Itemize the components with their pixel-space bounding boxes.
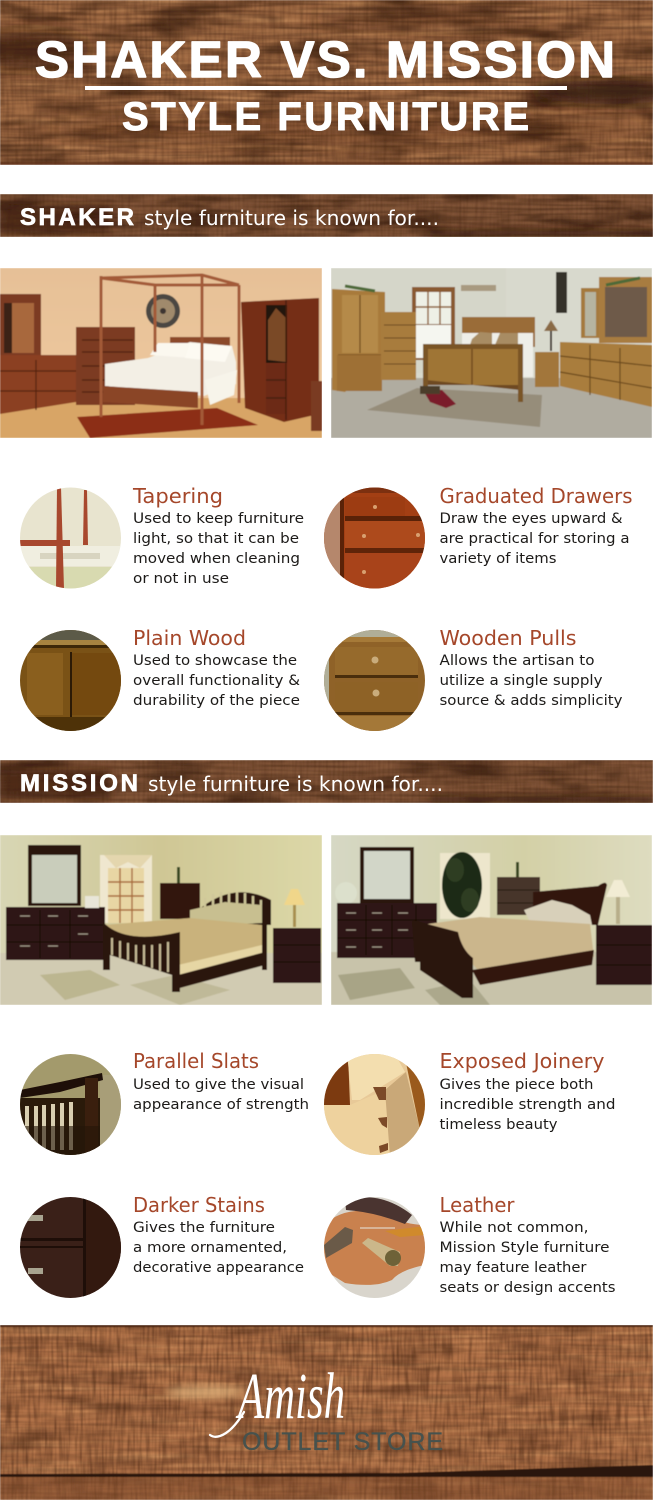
footer wood panel bbox=[0, 1325, 653, 1500]
graduated drawers heading: Graduated Drawers bbox=[440, 484, 632, 508]
tapering description: moved when cleaning bbox=[133, 551, 300, 567]
tapering description: light, so that it can be bbox=[133, 531, 299, 547]
darker stains description: decorative appearance bbox=[133, 1260, 304, 1276]
wooden pulls description bbox=[440, 653, 623, 709]
graduated drawers description: variety of items bbox=[440, 551, 556, 567]
plain wood description bbox=[133, 653, 300, 709]
icon: dovetail joint bbox=[324, 1054, 426, 1160]
shaker banner wood texture bbox=[0, 194, 653, 237]
exposed joinery heading: Exposed Joinery bbox=[440, 1049, 604, 1073]
tapering description: Used to keep furniture bbox=[133, 511, 304, 527]
feature: wooden pulls bbox=[324, 626, 623, 732]
feature: plain wood bbox=[20, 626, 300, 732]
shaker label: SHAKER bbox=[20, 204, 134, 231]
feature: tapering bbox=[20, 484, 304, 589]
wooden pulls heading: Wooden Pulls bbox=[440, 626, 576, 650]
darker stains description: a more ornamented, bbox=[133, 1240, 287, 1256]
footer wood texture bbox=[0, 1325, 653, 1500]
feature: parallel slats bbox=[20, 1049, 309, 1156]
logo: amish outlet store bbox=[210, 1360, 443, 1456]
feature: leather bbox=[324, 1193, 616, 1299]
photo: shaker oak bedroom bbox=[331, 268, 652, 438]
tapering description: or not in use bbox=[133, 571, 229, 587]
icon: dark stained drawers bbox=[20, 1197, 121, 1299]
plain wood heading: Plain Wood bbox=[133, 626, 246, 650]
exposed joinery description: timeless beauty bbox=[440, 1117, 558, 1133]
leather heading: Leather bbox=[440, 1193, 515, 1217]
shaker tagline: style furniture is known for.... bbox=[144, 206, 439, 230]
icon: tapered bed post bbox=[20, 487, 121, 589]
photo: mission slat bed bedroom bbox=[0, 835, 322, 1005]
feature: darker stains bbox=[20, 1193, 304, 1299]
plain wood description: durability of the piece bbox=[133, 693, 300, 709]
exposed joinery description bbox=[440, 1077, 616, 1133]
feature: exposed joinery bbox=[324, 1049, 616, 1160]
icon: oak panel bbox=[20, 630, 121, 732]
feature: graduated drawers bbox=[324, 484, 632, 589]
leather description: While not common, bbox=[440, 1220, 588, 1236]
parallel slats description: appearance of strength bbox=[133, 1097, 309, 1113]
title line 2: STYLE FURNITURE bbox=[122, 95, 529, 139]
mission label: MISSION bbox=[20, 770, 138, 797]
graduated drawers description: are practical for storing a bbox=[440, 531, 630, 547]
wooden pulls description: utilize a single supply bbox=[440, 673, 603, 689]
plain wood description: Used to showcase the bbox=[133, 653, 297, 669]
leather description bbox=[440, 1220, 616, 1296]
wooden pulls description: source & adds simplicity bbox=[440, 693, 623, 709]
section banner: mission bbox=[0, 760, 653, 803]
exposed joinery description: Gives the piece both bbox=[440, 1077, 594, 1093]
wooden pulls description: Allows the artisan to bbox=[440, 653, 595, 669]
photo: mission sleigh bed bedroom bbox=[331, 835, 652, 1005]
plain wood description: overall functionality & bbox=[133, 673, 300, 689]
darker stains description bbox=[133, 1220, 304, 1276]
mission tagline: style furniture is known for.... bbox=[148, 772, 443, 796]
section banner: shaker bbox=[0, 194, 653, 237]
title banner bbox=[0, 0, 653, 165]
darker stains description: Gives the furniture bbox=[133, 1220, 275, 1236]
graduated drawers description: Draw the eyes upward & bbox=[440, 511, 622, 527]
banner wood texture bbox=[0, 0, 653, 165]
icon: drawers bbox=[324, 487, 426, 589]
parallel slats description bbox=[133, 1077, 309, 1113]
logo script word: Amish bbox=[235, 1360, 345, 1433]
exposed joinery description: incredible strength and bbox=[440, 1097, 616, 1113]
icon: bed slats bbox=[20, 1054, 121, 1156]
mission banner wood texture bbox=[0, 760, 653, 803]
tapering heading: Tapering bbox=[132, 484, 223, 508]
logo store name: OUTLET STORE bbox=[242, 1428, 443, 1456]
leather description: may feature leather bbox=[440, 1260, 587, 1276]
tapering description bbox=[133, 511, 304, 587]
darker stains heading: Darker Stains bbox=[133, 1193, 265, 1217]
leather description: Mission Style furniture bbox=[440, 1240, 610, 1256]
icon: oak drawers with pulls bbox=[324, 630, 425, 732]
parallel slats description: Used to give the visual bbox=[133, 1077, 304, 1093]
icon: leather and tools bbox=[324, 1197, 425, 1299]
title line 1: SHAKER VS. MISSION bbox=[35, 31, 615, 88]
parallel slats heading: Parallel Slats bbox=[133, 1049, 259, 1073]
photo: shaker cherry bedroom bbox=[0, 268, 322, 438]
leather description: seats or design accents bbox=[440, 1280, 616, 1296]
logo script word bbox=[210, 1360, 345, 1437]
graduated drawers description bbox=[440, 511, 630, 567]
title divider bbox=[85, 86, 567, 90]
